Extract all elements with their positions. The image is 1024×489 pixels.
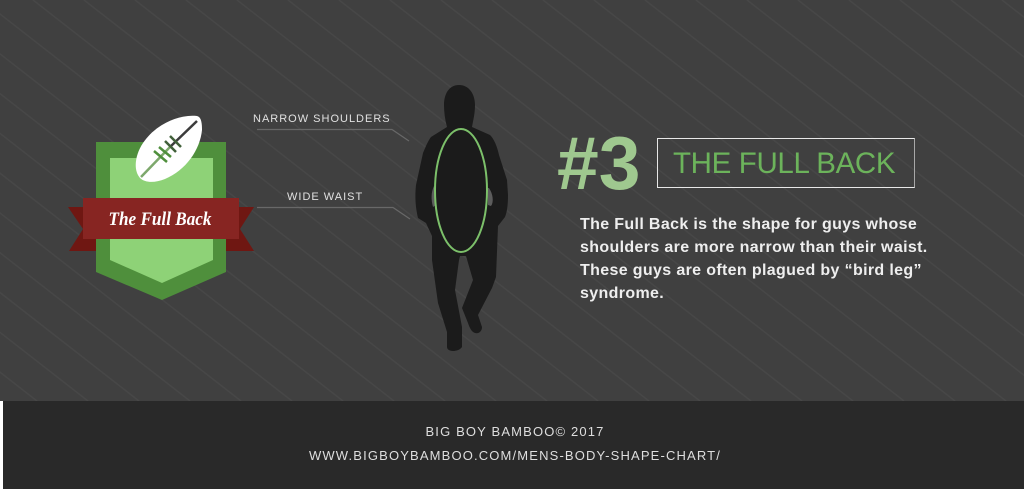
footer line 2: WWW.BIGBOYBAMBOO.COM/MENS-BODY-SHAPE-CHART/: [309, 448, 721, 463]
ribbon label: The Full Back: [108, 210, 212, 230]
badge: The Full Back: [68, 116, 254, 300]
oval outline: [435, 129, 487, 252]
description: shoulders are more narrow than their waist.: [580, 239, 928, 256]
ribbon tails: [68, 207, 254, 251]
title box: THE FULL BACK: [673, 147, 895, 180]
description: These guys are often plagued by “bird leg”: [580, 262, 922, 279]
silhouette figure with waist oval: [416, 85, 508, 351]
ribbon: [83, 198, 239, 239]
white edge: [0, 401, 3, 489]
description: The Full Back is the shape for guys whose: [580, 216, 917, 233]
silhouette: [415, 85, 508, 351]
description: syndrome.: [580, 285, 664, 302]
icon: rugby ball: [136, 116, 202, 182]
title box: [657, 138, 915, 188]
footer: [0, 401, 1024, 489]
arm gaps: [432, 186, 493, 207]
description: [580, 216, 928, 302]
footer line 1: BIG BOY BAMBOO© 2017: [425, 424, 604, 439]
shield: [96, 142, 226, 300]
label: wide waist: WIDE WAIST: [287, 191, 363, 203]
label: narrow shoulders: NARROW SHOULDERS: [253, 113, 391, 125]
number: #3: [557, 121, 640, 205]
